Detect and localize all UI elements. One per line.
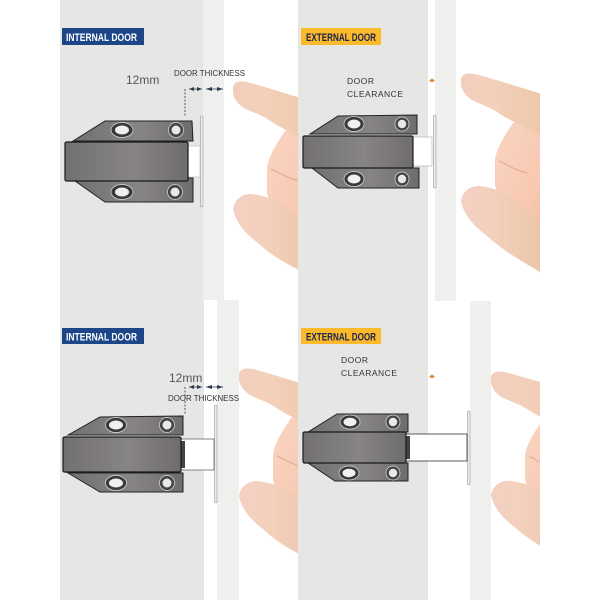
badge: external door bbox=[301, 28, 381, 45]
badge: internal door bbox=[62, 28, 144, 45]
hand bbox=[491, 372, 540, 546]
hand bbox=[461, 74, 540, 272]
hand bbox=[239, 368, 298, 554]
latch: closed bbox=[303, 115, 436, 188]
panel: external door closed bbox=[298, 0, 556, 301]
latch: open bbox=[303, 411, 470, 485]
badge: external door bbox=[301, 328, 381, 344]
label: door clearance bbox=[347, 76, 403, 99]
clearance arrows bbox=[429, 374, 435, 378]
latch: open bbox=[63, 405, 217, 503]
label: door clearance: DOOR bbox=[347, 76, 374, 86]
label: door clearance: DOOR bbox=[341, 355, 368, 365]
dimension arrows bbox=[185, 385, 223, 414]
hand bbox=[233, 82, 298, 270]
label: 12mm: 12mm bbox=[169, 371, 202, 385]
latch: closed bbox=[65, 116, 203, 207]
badge: internal door: INTERNAL DOOR bbox=[66, 32, 137, 44]
badge: external door: EXTERNAL DOOR bbox=[306, 32, 376, 44]
label: door clearance: CLEARANCE bbox=[341, 368, 397, 378]
label: door clearance bbox=[341, 355, 397, 378]
panel: internal door closed bbox=[60, 0, 298, 300]
dimension arrows bbox=[185, 87, 223, 117]
badge: external door: EXTERNAL DOOR bbox=[306, 332, 376, 344]
badge: internal door bbox=[62, 328, 144, 344]
label: door thickness: DOOR THICKNESS bbox=[168, 394, 239, 403]
badge: internal door: INTERNAL DOOR bbox=[66, 332, 137, 344]
panel: external door open bbox=[298, 300, 540, 600]
clearance arrows bbox=[429, 78, 435, 82]
label: 12mm: 12mm bbox=[126, 73, 159, 87]
panel: internal door open bbox=[60, 300, 298, 600]
label: door thickness: DOOR THICKNESS bbox=[174, 69, 245, 78]
label: door clearance: CLEARANCE bbox=[347, 89, 403, 99]
